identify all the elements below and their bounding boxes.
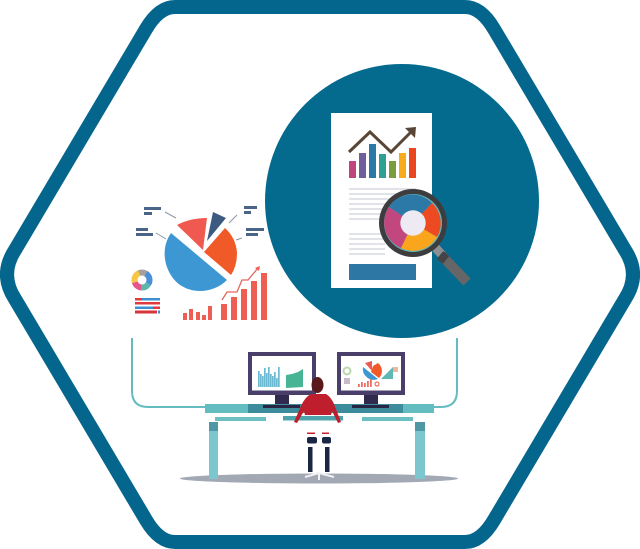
- head: [312, 377, 324, 393]
- monitor legend: [393, 367, 398, 372]
- desk top: [205, 404, 434, 413]
- red slice: [177, 218, 207, 250]
- monitor triangle chart: [381, 367, 393, 379]
- monitor legend left: [344, 378, 350, 384]
- monitor pie: [363, 367, 378, 380]
- document sheet: [331, 113, 432, 288]
- floor shadow: [180, 474, 458, 484]
- monitor small bars: [358, 379, 372, 387]
- pie chart: [136, 206, 264, 291]
- monitor stand: [275, 395, 289, 404]
- monitor donut: [344, 368, 350, 374]
- desk: [205, 404, 434, 479]
- pie labels: [136, 206, 264, 236]
- chair base: [305, 473, 334, 480]
- growth bars: [221, 273, 267, 320]
- monitor body: [248, 352, 316, 395]
- lens rim: [379, 189, 447, 257]
- left monitor: [248, 352, 316, 408]
- small donut chart: [132, 270, 152, 290]
- small bar chart: [183, 306, 212, 320]
- blue slice: [165, 233, 227, 291]
- stool legs: [307, 437, 331, 472]
- orange slice: [204, 228, 237, 275]
- monitor stand: [364, 395, 378, 404]
- large teal circle: [265, 64, 539, 338]
- trend arrow: [349, 127, 416, 152]
- right monitor: [337, 352, 405, 408]
- person at desk: [294, 377, 341, 480]
- blue button bar: [349, 264, 416, 280]
- connector line: [132, 338, 457, 407]
- report document: [331, 113, 432, 288]
- monitor area chart: [286, 369, 303, 388]
- keyboard: [283, 416, 343, 420]
- magnifying glass: [379, 189, 467, 282]
- desk left leg: [209, 422, 218, 479]
- monitor body: [337, 352, 405, 395]
- handle: [442, 256, 467, 282]
- report bar chart: [349, 144, 416, 178]
- text lines: [349, 189, 416, 254]
- growth bar chart: [221, 266, 267, 320]
- lens donut chart: [384, 194, 441, 251]
- monitor bars: [258, 367, 280, 387]
- desk drawers: [215, 417, 266, 421]
- growth trend line: [222, 268, 258, 300]
- pie leader lines: [156, 212, 242, 240]
- red socks: [307, 432, 329, 434]
- small legend bars: [135, 298, 160, 314]
- navy slice: [207, 212, 226, 241]
- desk right leg: [415, 422, 425, 479]
- monitor small circle: [375, 382, 379, 386]
- torso and arms: [294, 394, 341, 423]
- growth arrow head: [255, 266, 260, 271]
